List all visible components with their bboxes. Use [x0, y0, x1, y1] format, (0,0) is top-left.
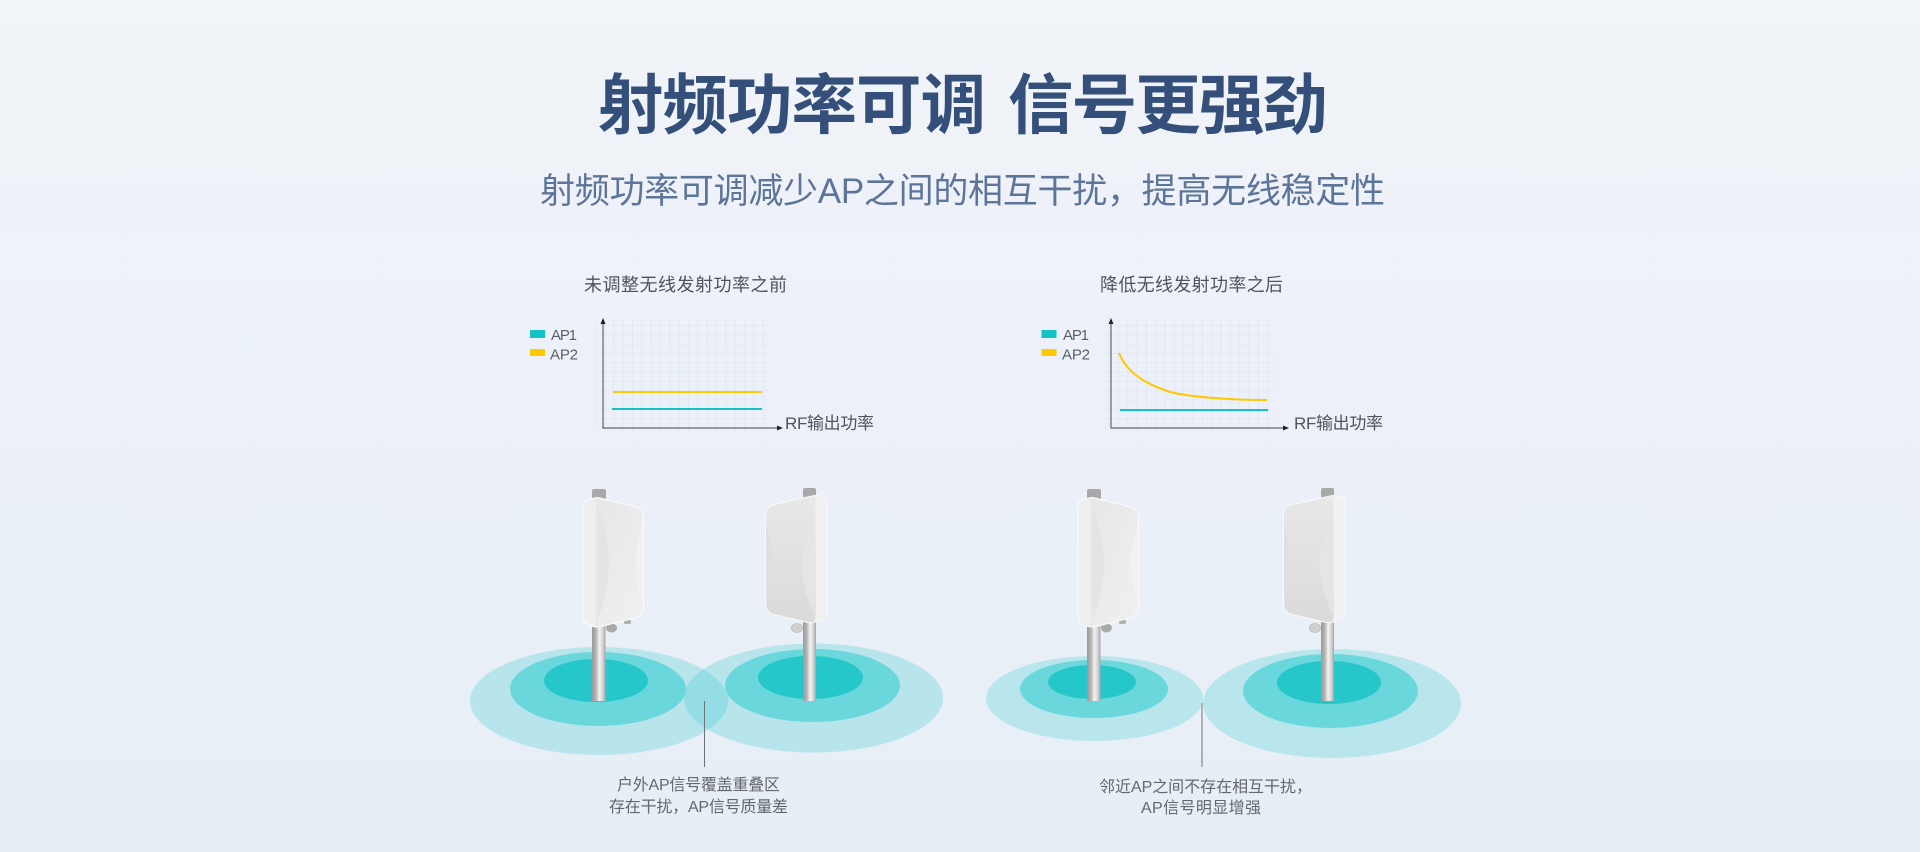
axis label: after: RF输出功率: [1294, 414, 1383, 433]
callout text: no interference: [1099, 778, 1312, 817]
legend: before: AP2: [550, 346, 578, 364]
callout line: overlap: [704, 701, 706, 767]
series AP1 line: after: [1120, 409, 1268, 411]
axis label: before: RF输出功率: [785, 414, 874, 433]
callout text: overlap: 户外AP信号覆盖重叠区: [617, 776, 780, 794]
axis arrowheads: after: [1108, 318, 1289, 430]
subtitle: 射频功率可调减少AP之间的相互干扰，提高无线稳定性: [540, 172, 1385, 211]
coverage ellipses: left AP overlap: [470, 644, 943, 755]
callout line: no interference: [1201, 703, 1203, 767]
title: [598, 52, 1328, 147]
icon: outdoor AP 4: [1284, 488, 1346, 701]
icon: outdoor AP 2: [766, 488, 828, 701]
coverage ellipses: separated APs: [986, 649, 1461, 758]
series AP2 curve: after: [1119, 353, 1267, 400]
axes: after: [1111, 322, 1286, 428]
icon: outdoor AP 3: [1078, 489, 1138, 701]
title: 射频功率可调: [598, 52, 986, 147]
series AP1 line: before: [612, 408, 762, 410]
series AP2 line: before: [613, 391, 762, 393]
line chart: after: [1042, 318, 1383, 433]
panel: before adjusting power: [470, 275, 943, 816]
title: 信号更强劲: [1008, 52, 1328, 147]
panel: after lowering power: [986, 275, 1461, 817]
callout text: overlap: 存在干扰，AP信号质量差: [609, 798, 788, 816]
axis arrowheads: before: [600, 318, 783, 430]
callout text: overlap: [609, 776, 788, 816]
line chart: before: [530, 318, 874, 433]
legend: after: [1042, 327, 1090, 364]
callout text: no interference: 邻近AP之间不存在相互干扰，: [1099, 778, 1312, 796]
callout text: no interference: AP信号明显增强: [1141, 799, 1261, 817]
legend: before: AP1: [551, 327, 577, 344]
legend: before: [530, 327, 578, 364]
icon: outdoor AP 1: [583, 489, 644, 701]
chart title: after: 降低无线发射功率之后: [1100, 275, 1283, 295]
legend: after: AP1: [1063, 327, 1089, 344]
legend: after: AP2: [1062, 346, 1090, 364]
axes: before: [603, 322, 780, 428]
chart title: before: 未调整无线发射功率之前: [584, 275, 787, 295]
